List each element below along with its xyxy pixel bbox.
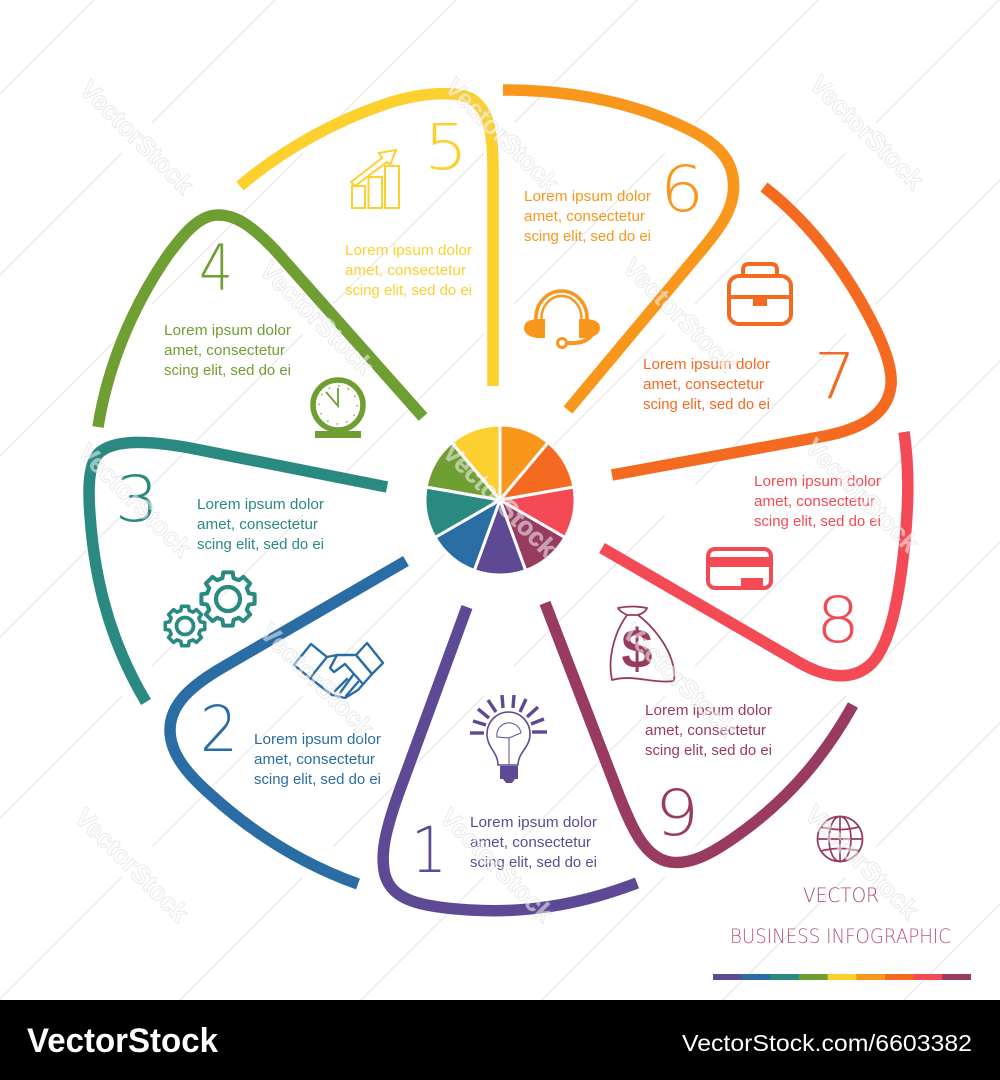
- watermark: VectorStock: [804, 69, 930, 195]
- icon: credit card: [707, 549, 772, 588]
- text block 6: [524, 188, 651, 245]
- text block 8: amet, consectetur: [754, 493, 875, 510]
- icon: headset: [524, 291, 600, 348]
- number 6: 6: [660, 153, 704, 226]
- text block 4: scing elit, sed do ei: [164, 362, 291, 379]
- curve 8: [602, 432, 908, 676]
- icon: growth chart: [351, 150, 399, 208]
- text block 2: Lorem ipsum dolor: [254, 731, 381, 748]
- icon: handshake: [294, 643, 383, 698]
- text block 9: amet, consectetur: [645, 722, 766, 739]
- icon: money bag: $: [621, 617, 653, 680]
- text block 5: [345, 242, 472, 299]
- number 4: 4: [199, 232, 233, 305]
- text block 6: Lorem ipsum dolor: [524, 188, 651, 205]
- text block 4: [164, 322, 291, 379]
- text block 3: [197, 496, 324, 553]
- text block 7: amet, consectetur: [643, 376, 764, 393]
- heading: vector: VECTOR: [803, 884, 879, 907]
- watermark: VectorStock: [254, 617, 380, 743]
- watermark: VectorStock: [439, 72, 565, 198]
- curve 5: [240, 94, 493, 386]
- panel 4: green time segment: [98, 215, 423, 438]
- text block 8: [754, 473, 881, 530]
- text block 9: scing elit, sed do ei: [645, 742, 772, 759]
- watermark: VectorStock: [617, 252, 743, 378]
- watermark: VectorStock: [799, 799, 925, 925]
- footer bar: [0, 1000, 1000, 1080]
- curve 3: [89, 442, 387, 702]
- rainbow legend bar: [713, 974, 971, 980]
- text block 5: Lorem ipsum dolor: [345, 242, 472, 259]
- text block 7: Lorem ipsum dolor: [643, 356, 770, 373]
- number 1: 1: [411, 814, 447, 887]
- watermark: VectorStock: [74, 74, 200, 200]
- watermark: VectorStock: [617, 617, 743, 743]
- text block 7: scing elit, sed do ei: [643, 396, 770, 413]
- curve 4: [98, 215, 423, 427]
- curve 7: [612, 187, 891, 475]
- number 5: 5: [424, 111, 468, 184]
- text block 1: Lorem ipsum dolor: [470, 814, 597, 831]
- text block 9: Lorem ipsum dolor: [645, 702, 772, 719]
- panel 7: dark orange business segment: [612, 187, 891, 475]
- panel 8: red payment segment: [602, 432, 908, 676]
- panel 9: maroon finance segment: [545, 603, 853, 863]
- text block 3: scing elit, sed do ei: [197, 536, 324, 553]
- number 8: 8: [816, 584, 860, 657]
- number 2: 2: [200, 693, 238, 766]
- text block 6: scing elit, sed do ei: [524, 228, 651, 245]
- number 7: 7: [814, 340, 856, 413]
- text block 4: Lorem ipsum dolor: [164, 322, 291, 339]
- panel 3: teal settings segment: [89, 442, 387, 702]
- curve 9: [545, 603, 853, 863]
- watermark: VectorStock: [254, 255, 380, 381]
- text block 9: [645, 702, 772, 759]
- heading: business infographic: BUSINESS INFOGRAPHIC: [730, 925, 951, 948]
- panel 2: blue partnership segment: [170, 561, 406, 884]
- text block 2: amet, consectetur: [254, 751, 375, 768]
- text block 8: scing elit, sed do ei: [754, 513, 881, 530]
- text block 1: amet, consectetur: [470, 834, 591, 851]
- watermark: VectorStock: [799, 432, 925, 558]
- footer brand: VectorStock: [27, 1022, 218, 1060]
- text block 3: amet, consectetur: [197, 516, 318, 533]
- text block 1: scing elit, sed do ei: [470, 854, 597, 871]
- panel 1: purple idea segment: [383, 607, 637, 911]
- text block 5: scing elit, sed do ei: [345, 282, 472, 299]
- text block 1: [470, 814, 597, 871]
- panel 6: orange support segment: [503, 90, 734, 410]
- text block 6: amet, consectetur: [524, 208, 645, 225]
- icon: briefcase: [729, 264, 791, 324]
- icon: money bag: [611, 606, 674, 682]
- icon: gears: [165, 572, 255, 646]
- watermark: VectorStock: [434, 802, 560, 928]
- icon: globe: [818, 816, 862, 862]
- curve 6: [503, 90, 734, 410]
- text block 8: Lorem ipsum dolor: [754, 473, 881, 490]
- watermark: VectorStock: [437, 437, 563, 563]
- text block 2: scing elit, sed do ei: [254, 771, 381, 788]
- number 3: 3: [115, 463, 159, 536]
- watermark: VectorStock: [69, 802, 195, 928]
- curve 1: [383, 607, 637, 911]
- curve 2: [170, 561, 406, 884]
- watermark: [69, 69, 930, 928]
- text block 2: [254, 731, 381, 788]
- number 9: 9: [655, 777, 699, 850]
- text block 5: amet, consectetur: [345, 262, 466, 279]
- text block 7: [643, 356, 770, 413]
- central pie chart: [425, 425, 575, 575]
- panel 5: yellow growth segment: [240, 94, 493, 386]
- watermark: VectorStock: [72, 437, 198, 563]
- text block 3: Lorem ipsum dolor: [197, 496, 324, 513]
- icon: clock: [313, 380, 363, 438]
- footer image url: VectorStock.com/6603382: [682, 1030, 972, 1056]
- text block 4: amet, consectetur: [164, 342, 285, 359]
- icon: light bulb: [470, 695, 547, 783]
